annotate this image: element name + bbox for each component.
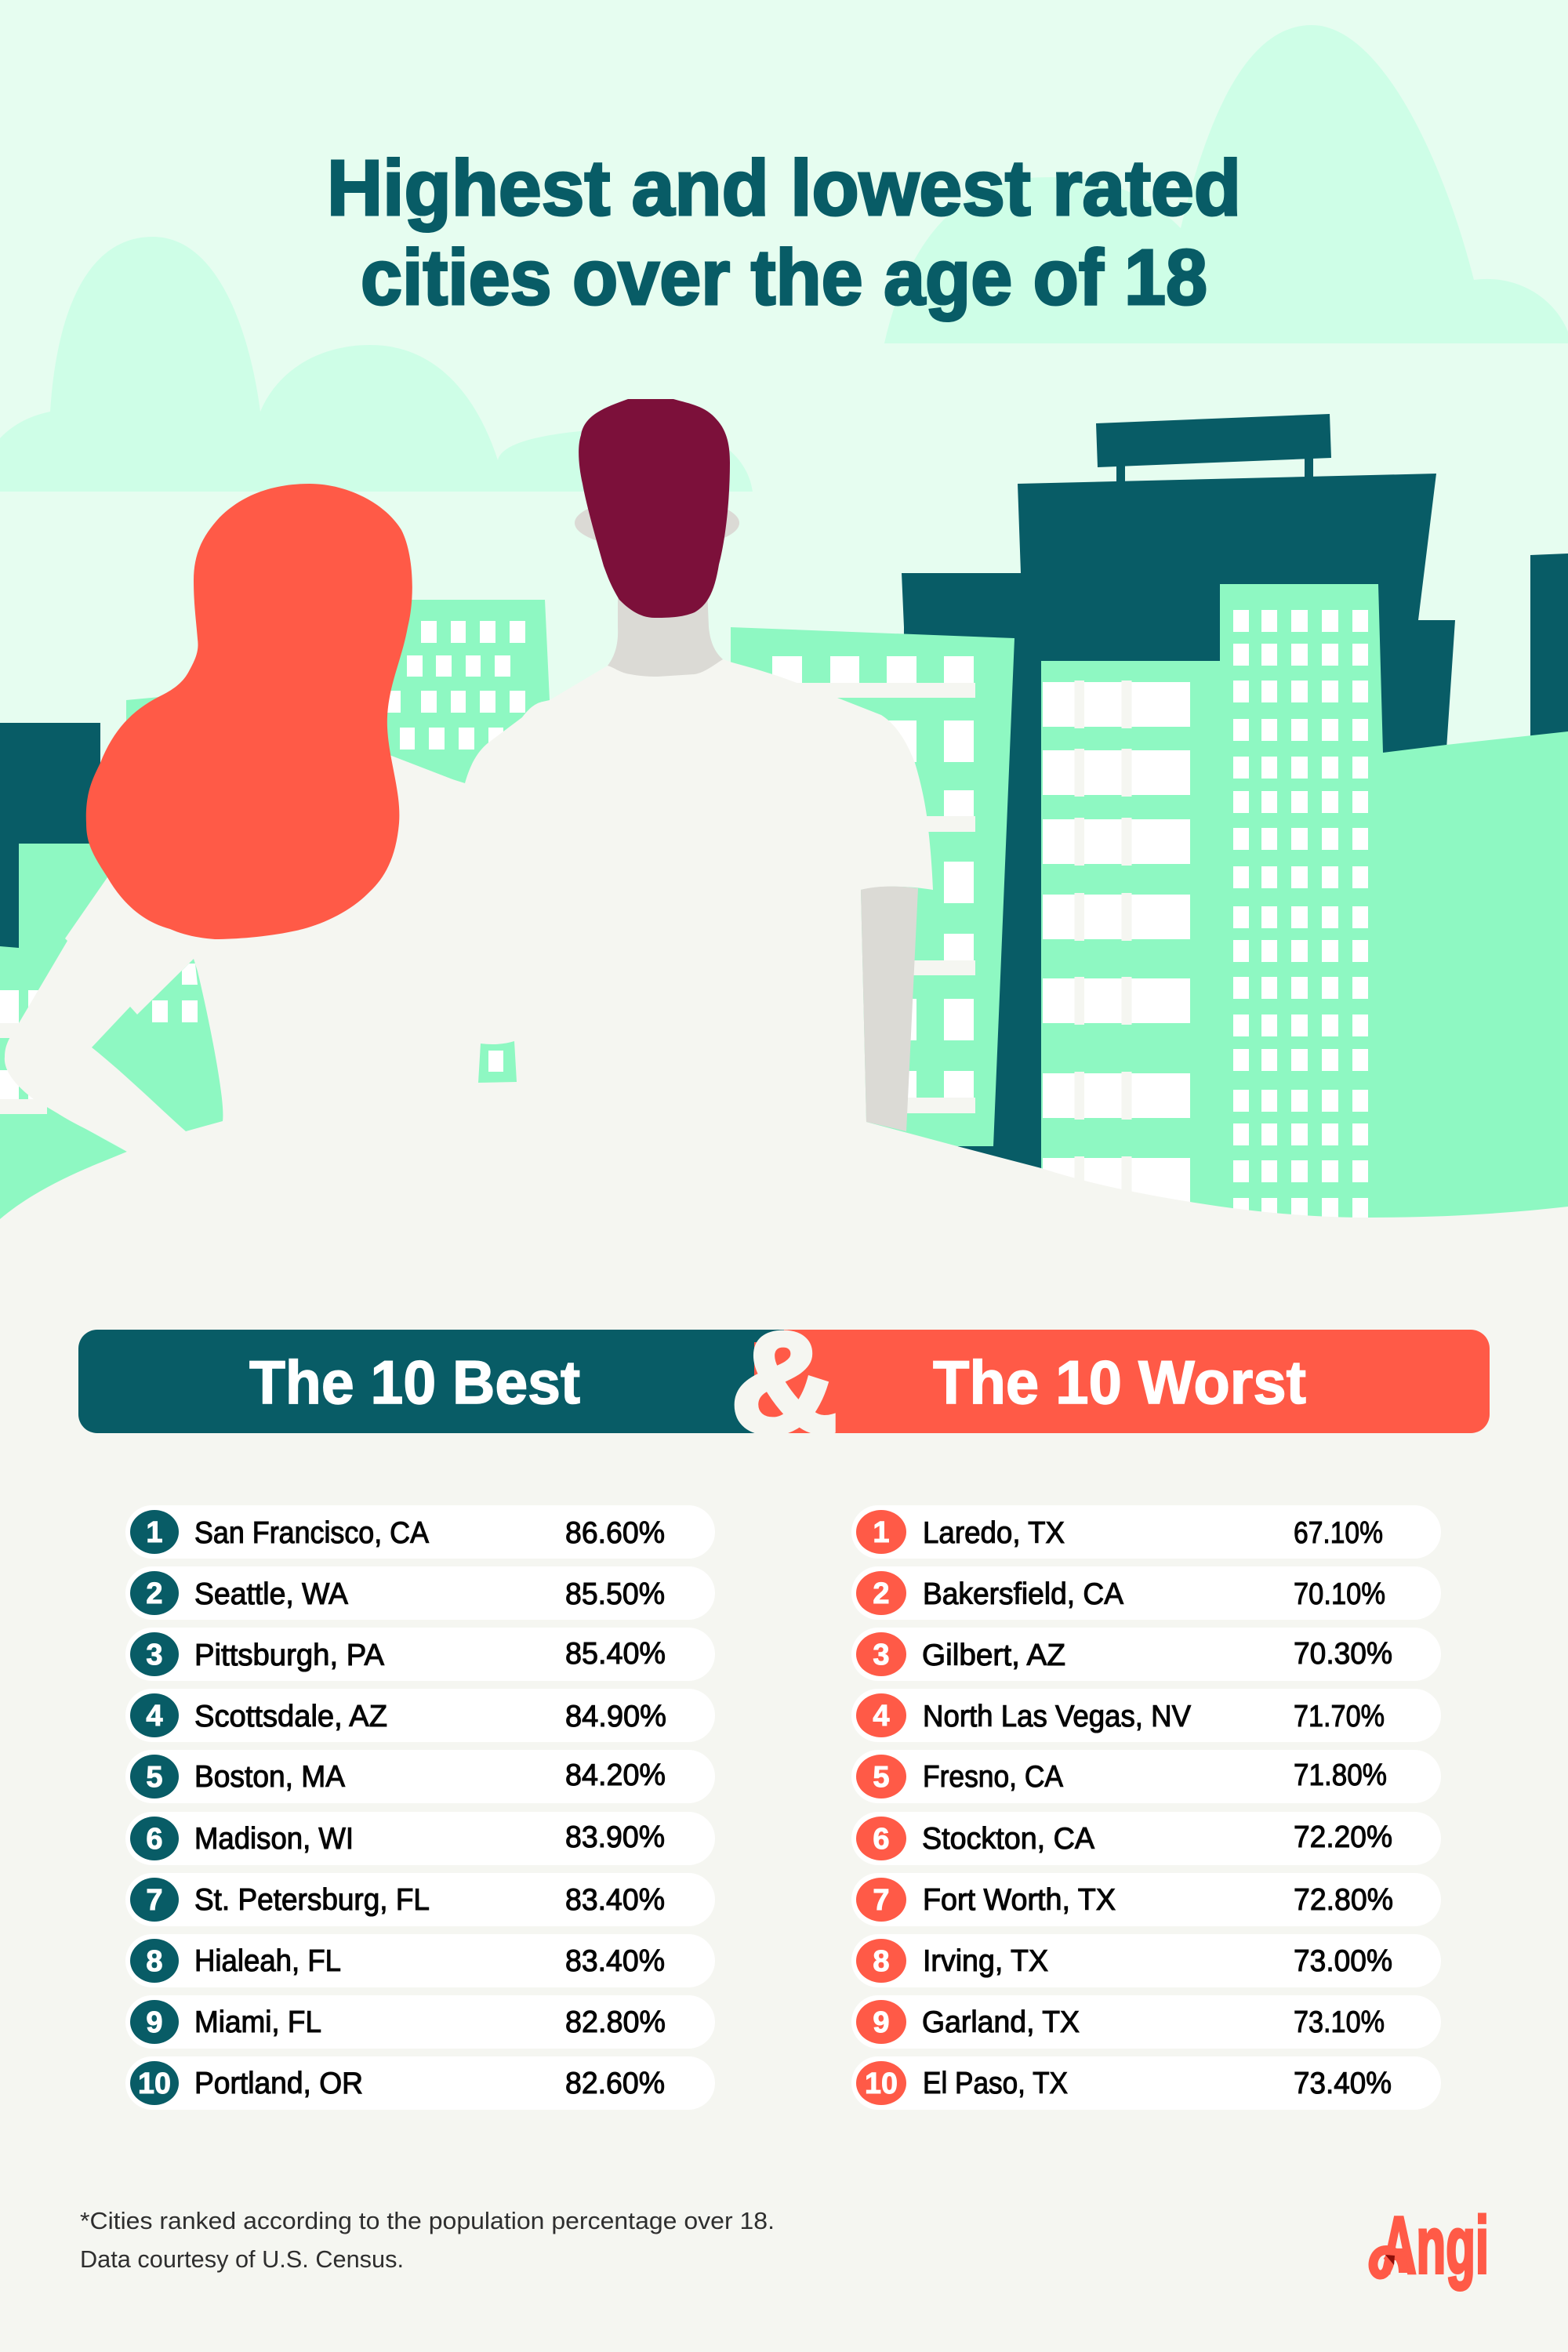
title: [327, 144, 1241, 321]
row 1: 1: [873, 1516, 890, 1549]
heading: the 10 best: The 10 Best: [249, 1348, 580, 1417]
row 2: 2: [873, 1577, 890, 1610]
row 7: Fort Worth, TX: [923, 1883, 1116, 1917]
row 4: North Las Vegas, NV: [923, 1700, 1191, 1733]
title: cities over the age of 18: [361, 234, 1207, 321]
title: Highest and lowest rated: [327, 144, 1241, 232]
footnote: *Cities ranked according to the population percentage over 18.: [80, 2207, 775, 2234]
row 6: 72.20%: [1294, 1820, 1392, 1854]
row 9: 9: [146, 2006, 163, 2039]
row 8: 8: [146, 1945, 163, 1978]
row 9: 82.80%: [565, 2005, 666, 2039]
row 9: Miami, FL: [194, 2005, 321, 2039]
heading: the 10 worst: The 10 Worst: [933, 1348, 1306, 1417]
row 10: 10: [138, 2067, 171, 2100]
row 2: 2: [146, 1577, 163, 1610]
row 3: 70.30%: [1294, 1637, 1392, 1671]
row 10: El Paso, TX: [923, 2067, 1068, 2100]
sky background: [0, 0, 1568, 1254]
man's ears: [575, 497, 739, 549]
row 9: 9: [873, 2006, 890, 2039]
row 1: San Francisco, CA: [194, 1516, 429, 1550]
best list: [125, 1505, 715, 2110]
row 10: [125, 2056, 715, 2110]
row 8: [125, 1934, 715, 1987]
worst list: [851, 1505, 1441, 2110]
skyline: mint building behind the couple: [126, 600, 550, 784]
row 6: Madison, WI: [194, 1822, 354, 1856]
header bar: [78, 1330, 1490, 1433]
ampersand: &: [731, 1302, 837, 1462]
row 10: 10: [865, 2067, 898, 2100]
skyline: mint tower with wide windows: [1041, 661, 1229, 1225]
row 4: 84.90%: [565, 1700, 666, 1733]
row 3: Gilbert, AZ: [922, 1639, 1065, 1672]
row 4: 4: [146, 1700, 163, 1733]
row 2: 85.50%: [565, 1577, 665, 1611]
row 1: 86.60%: [565, 1516, 665, 1550]
row 5: 71.80%: [1294, 1759, 1387, 1792]
row 3: 3: [146, 1639, 163, 1671]
row 7: 83.40%: [565, 1883, 665, 1917]
clouds left: [0, 237, 753, 492]
row 1: 1: [146, 1516, 163, 1549]
row 7: 7: [873, 1884, 890, 1917]
row 6: [851, 1812, 1441, 1865]
row 4: Scottsdale, AZ: [194, 1700, 387, 1733]
row 3: 3: [873, 1639, 890, 1671]
man's hair: [579, 399, 730, 618]
skyline: left building: [0, 723, 127, 1219]
row 5: 5: [873, 1761, 890, 1794]
row 6: [125, 1812, 715, 1865]
row 7: St. Petersburg, FL: [194, 1883, 430, 1917]
row 10: 73.40%: [1294, 2067, 1392, 2100]
row 4: [851, 1689, 1441, 1742]
row 9: [851, 1995, 1441, 2049]
building patch between the figures: [478, 1041, 517, 1083]
man's arm: [861, 887, 918, 1131]
skyline: mint tower with small windows and ground block: [1220, 584, 1568, 1231]
row 2: Seattle, WA: [194, 1577, 348, 1611]
row 4: 4: [873, 1700, 890, 1733]
row 1: Laredo, TX: [923, 1516, 1065, 1550]
man's neck: [608, 588, 723, 677]
row 9: Garland, TX: [922, 2005, 1080, 2039]
woman's arm gap with building view: [92, 959, 223, 1131]
row 6: 6: [873, 1823, 890, 1856]
footnote: Data courtesy of U.S. Census.: [80, 2245, 404, 2273]
row 10: Portland, OR: [194, 2067, 363, 2100]
row 4: 71.70%: [1294, 1700, 1385, 1733]
footnote: [80, 2207, 775, 2273]
row 2: Bakersfield, CA: [923, 1577, 1123, 1611]
row 5: [125, 1750, 715, 1803]
row 8: [851, 1934, 1441, 1987]
row 1: [851, 1505, 1441, 1559]
row 8: Hialeah, FL: [194, 1944, 341, 1978]
row 10: 82.60%: [565, 2067, 665, 2100]
clouds right: [884, 25, 1568, 343]
row 1: 67.10%: [1294, 1516, 1383, 1550]
row 3: Pittsburgh, PA: [194, 1639, 384, 1672]
skyline: mint building with balconies: [731, 627, 1014, 1146]
row 6: 83.90%: [565, 1820, 665, 1854]
row 2: 70.10%: [1294, 1577, 1385, 1611]
row 3: 85.40%: [565, 1637, 666, 1671]
woman's hair: [86, 484, 412, 939]
row 2: [851, 1566, 1441, 1620]
row 7: 72.80%: [1294, 1883, 1393, 1917]
row 7: [851, 1873, 1441, 1926]
logo: Angi: Angi: [1381, 2200, 1489, 2290]
row 2: [125, 1566, 715, 1620]
row 7: [125, 1873, 715, 1926]
row 5: [851, 1750, 1441, 1803]
row 3: [851, 1628, 1441, 1681]
row 3: [125, 1628, 715, 1681]
row 8: 73.00%: [1294, 1944, 1392, 1978]
row 5: 84.20%: [565, 1759, 666, 1792]
row 5: Fresno, CA: [923, 1760, 1063, 1794]
row 1: [125, 1505, 715, 1559]
row 7: 7: [146, 1884, 163, 1917]
row 9: 73.10%: [1294, 2005, 1385, 2039]
row 5: 5: [146, 1761, 163, 1794]
row 10: [851, 2056, 1441, 2110]
logo: Angi: [1374, 2200, 1489, 2290]
row 8: 8: [873, 1945, 890, 1978]
row 8: 83.40%: [565, 1944, 665, 1978]
row 9: [125, 1995, 715, 2049]
row 8: Irving, TX: [923, 1944, 1048, 1978]
row 6: Stockton, CA: [922, 1822, 1094, 1856]
row 5: Boston, MA: [194, 1760, 345, 1794]
couple bodies and foreground ground: [0, 659, 1568, 2352]
row 4: [125, 1689, 715, 1742]
row 6: 6: [146, 1823, 163, 1856]
skyline: teal building with rooftop sign: [902, 414, 1568, 1176]
